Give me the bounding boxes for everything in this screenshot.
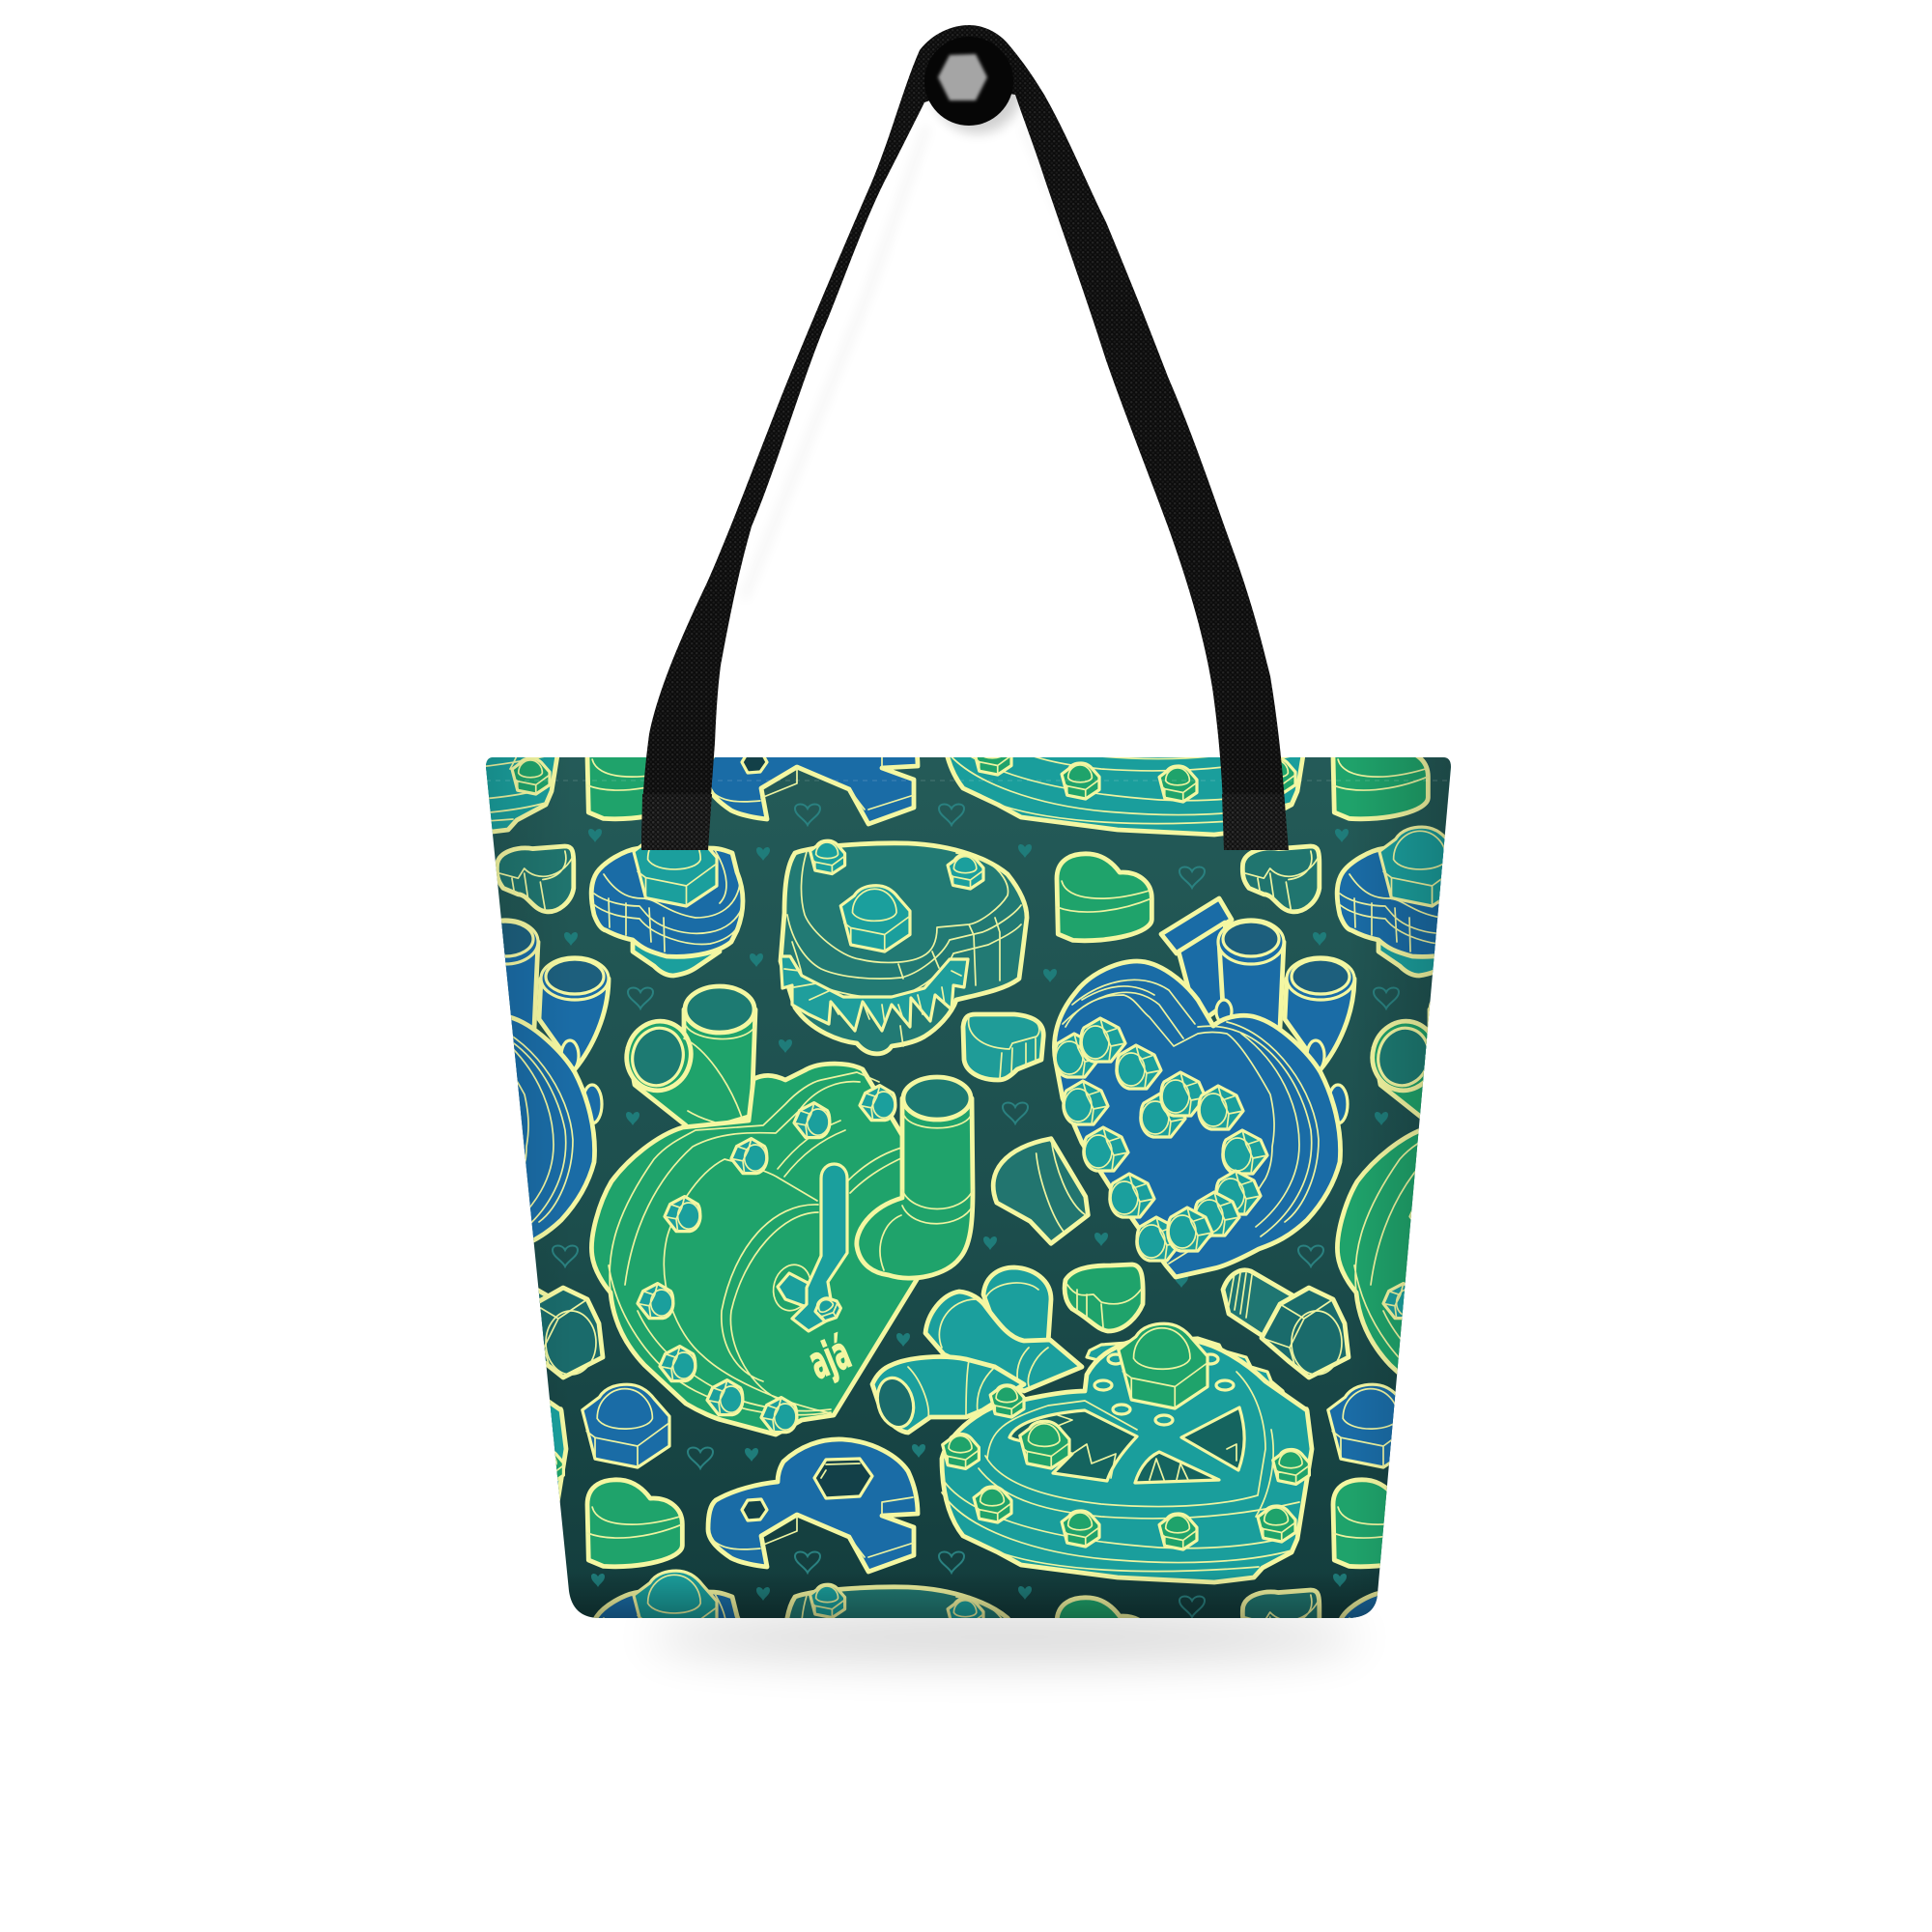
heart plate lines <box>787 852 1021 1046</box>
bag fabric background <box>473 744 1468 1633</box>
wrench small hole <box>742 1499 767 1520</box>
heart body <box>942 1341 1312 1582</box>
small hearts filled <box>564 829 1388 1601</box>
blue nut <box>582 1384 669 1467</box>
green heart block top left <box>585 757 647 821</box>
nut top left <box>810 840 845 874</box>
pipe opening two <box>1287 957 1354 1000</box>
wrench repeat top <box>711 757 920 827</box>
fabric edge shading <box>473 744 1468 1633</box>
gear teeth facets <box>784 969 961 1024</box>
pipe two <box>1285 979 1354 1069</box>
small green heart <box>1065 1264 1143 1331</box>
muted small heart repeat right <box>1242 846 1320 912</box>
back nuts <box>1216 1000 1348 1123</box>
inner gear teeth <box>1048 1415 1236 1480</box>
teal small heart <box>963 1014 1043 1080</box>
fabric bottom shading <box>473 744 1468 1633</box>
wrench hex hole <box>814 1459 872 1498</box>
gear heart repeat bottom <box>784 1582 1010 1618</box>
hex bolt with thread <box>1223 1270 1349 1378</box>
lever boss <box>778 1273 811 1307</box>
strap hanging shadow <box>744 126 1217 599</box>
inner ring lines <box>609 1072 905 1415</box>
central nut <box>840 886 910 952</box>
rim nuts <box>943 1385 1309 1549</box>
heart ring lines <box>1063 980 1319 1264</box>
bag drop shadow <box>647 1614 1362 1661</box>
main green nut <box>1119 1323 1208 1408</box>
right strap stitched end <box>1222 794 1289 850</box>
green heart block lower left <box>587 1480 682 1567</box>
rear teeth <box>1087 1338 1312 1449</box>
stacked heart repeat bottom right <box>1339 1591 1378 1618</box>
tote bag body with pattern <box>486 757 1451 1618</box>
teal heart repeat top <box>872 520 1312 835</box>
window bottom <box>1135 1452 1219 1483</box>
logo mark: ajá <box>802 1326 858 1389</box>
Y pipe top opening <box>685 986 754 1033</box>
nut top right <box>948 855 983 889</box>
wedge stem <box>1179 923 1232 1024</box>
pipe one <box>1219 942 1284 1029</box>
green heart block repeat bottom <box>1055 1595 1140 1618</box>
ring of teal bolts <box>1055 1018 1267 1261</box>
elbow opening <box>872 1374 919 1432</box>
rear pipe lobe <box>983 1267 1051 1352</box>
pipe opening one <box>1218 920 1284 964</box>
pipe lines <box>939 1283 1048 1386</box>
top stitching line <box>486 780 1451 781</box>
lever boss outline <box>768 1261 816 1315</box>
teal heart repeat top left <box>127 520 566 835</box>
middle pipe <box>925 1292 1082 1391</box>
green heart repeat right <box>1337 986 1719 1435</box>
wedge fitting <box>1161 898 1232 953</box>
right strap <box>969 25 1288 850</box>
window right <box>1181 1407 1244 1470</box>
elbow tube <box>872 1357 1024 1433</box>
concentric rim lines <box>942 1372 1299 1572</box>
green heart block lower right <box>1331 1477 1387 1569</box>
elbow pipe <box>857 1098 973 1278</box>
Y pipe on green heart <box>628 1009 755 1135</box>
big teal heart <box>872 1267 1312 1582</box>
muted heart down <box>993 1139 1088 1243</box>
heart bolts <box>638 1086 895 1433</box>
muted small heart <box>497 846 574 912</box>
big green heart <box>591 986 973 1435</box>
big blue heart <box>1054 898 1354 1277</box>
lever bolt <box>811 1293 843 1325</box>
lever handle <box>792 1164 847 1331</box>
elbow pipe opening <box>903 1077 971 1120</box>
window nut <box>1020 1421 1069 1468</box>
blue stacked heart with nut <box>591 827 743 976</box>
left strap stitched end <box>641 794 712 850</box>
blue wrench <box>708 1439 918 1572</box>
gear teeth <box>781 956 968 1031</box>
teal heart repeat left <box>127 1267 566 1582</box>
stacked heart repeat bottom <box>593 1569 740 1618</box>
nut on stacked heart <box>634 827 717 906</box>
gear heart <box>781 840 1027 1054</box>
green heart block <box>1057 854 1151 941</box>
Y pipe lines <box>684 1026 755 1122</box>
muted small heart repeat bottom right <box>1240 1588 1321 1618</box>
small hearts outlined <box>553 804 1399 1617</box>
green heart block top right <box>1331 757 1431 821</box>
left strap <box>641 25 969 850</box>
window left <box>1009 1410 1137 1481</box>
stacked heart repeat right <box>1335 825 1445 978</box>
green heart body <box>591 1064 918 1435</box>
elbow pipe inner lines <box>880 1116 973 1270</box>
hex bolt repeat left <box>538 1285 605 1379</box>
blue nut repeat right <box>1326 1383 1395 1469</box>
heart body <box>1054 961 1341 1277</box>
blue heart repeat left <box>308 898 609 1277</box>
elbow lines <box>908 1360 993 1420</box>
wall peg <box>924 37 1022 133</box>
peg hexagon centre <box>938 54 987 100</box>
Y pipe side opening <box>619 1014 698 1097</box>
holes <box>1094 1354 1234 1425</box>
